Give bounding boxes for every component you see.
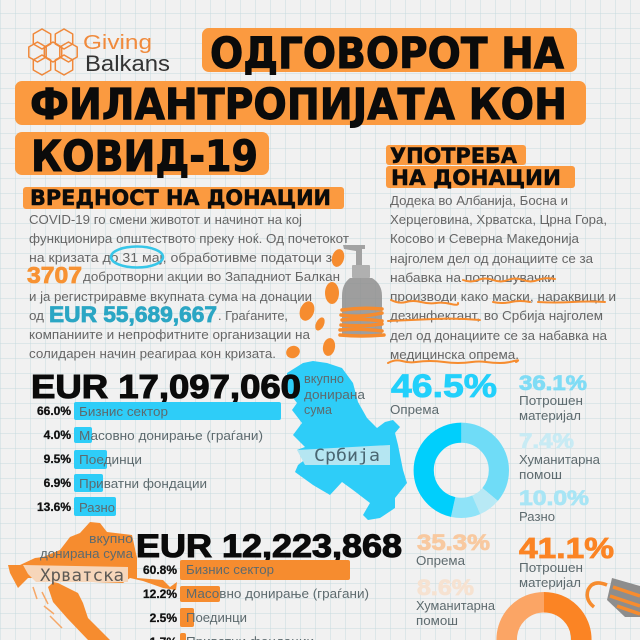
stat: humanitarian aid: 8.6%: [417, 575, 474, 600]
text block: use paragraph: набавка на потрошувачки: [390, 270, 555, 285]
stat: equipment: Опрема: [416, 553, 466, 568]
stat: consumables: материјал: [519, 408, 581, 423]
icon: sanitizer drops: [284, 248, 346, 360]
text block: use paragraph: Херцеговина, Хрватска, Црна Гора,: [390, 212, 607, 227]
panel: Serbia donations: [31, 368, 366, 516]
stat: equipment: 35.3%: [417, 530, 490, 555]
total: Serbia: EUR 17,097,060: [31, 368, 301, 405]
bar chart: Serbia donors: 9.5%: [44, 452, 71, 466]
text block: intro paragraph: и ја регистриравме вкупната сума на донации: [29, 289, 312, 304]
stat: other: Разно: [519, 509, 555, 524]
heading: value of donations: ВРЕДНОСТ НА ДОНАЦИИ: [30, 186, 331, 210]
stat: equipment: Опрема: [390, 402, 440, 417]
bar chart: Serbia donors: Приватни фондации: [79, 476, 207, 491]
panel: Serbia use of donations: [390, 368, 601, 524]
map: Croatia: [8, 522, 177, 640]
panel: Croatia donations: [40, 528, 402, 640]
text block: use paragraph: дезинфектант, во Србија најголем: [390, 308, 603, 323]
total: Croatia: вкупно: [89, 531, 133, 546]
title line 2: ФИЛАНТРОПИЈАТА КОН: [30, 80, 567, 130]
logo wordmark: Giving: [83, 32, 152, 54]
stat: equipment: 46.5%: [391, 368, 497, 404]
heading: use of donations: УПОТРЕБА: [390, 144, 518, 168]
bar chart: Croatia donors: [143, 560, 369, 640]
map label: Croatia: Хрватска: [40, 566, 124, 586]
Dalmatian islands: [33, 587, 62, 628]
text block: intro paragraph: COVID-19 го смени животот и начинот на кој: [29, 212, 302, 227]
callout: circled date: [111, 246, 163, 268]
icon: sanitizer bottle: [340, 245, 384, 336]
bar chart: Croatia donors: Бизнис сектор: [186, 562, 274, 577]
bar chart: Croatia donors: 2.5%: [150, 611, 177, 625]
stat: humanitarian aid: [416, 575, 496, 628]
stat: humanitarian aid: Хуманитарна: [416, 598, 496, 613]
icon: face mask: [587, 578, 640, 617]
title line 3: КОВИД-19: [31, 132, 258, 182]
bar chart: Croatia donors: 60.8%: [143, 563, 177, 577]
logo wordmark: Balkans: [85, 51, 170, 76]
text block: use paragraph: најголем дел од донациите се за: [390, 251, 594, 266]
bar chart: Serbia donors: Разно: [79, 500, 115, 515]
bar chart: Serbia donors: 6.9%: [44, 476, 71, 490]
donut chart: Serbia: [424, 433, 499, 508]
stat: consumables: 36.1%: [519, 372, 587, 395]
text block: intro paragraph: компаниите и непрофитните организации на: [29, 327, 311, 342]
text block: intro paragraph: 3707: [27, 262, 82, 288]
bar chart: Serbia donors: Бизнис сектор: [79, 404, 168, 419]
stat: other: 10.0%: [519, 487, 589, 510]
bar chart: Croatia donors: Масовно донирање (граѓани): [186, 586, 369, 601]
stat: consumables: 41.1%: [519, 533, 614, 565]
text block: use paragraph: медицинска опрема.: [390, 347, 519, 362]
stat: consumables: [519, 372, 587, 423]
total: Serbia: донирана: [304, 387, 366, 402]
total: Serbia: [31, 368, 366, 417]
text block: intro paragraph: [27, 212, 349, 361]
stat: consumables: Потрошен: [519, 560, 583, 575]
stat: humanitarian aid: помош: [416, 613, 458, 628]
text block: intro paragraph: EUR 55,689,667: [49, 302, 217, 327]
text block: use paragraph: Додека во Албанија, Босна и: [390, 193, 568, 208]
stat: humanitarian aid: 7.4%: [519, 430, 574, 453]
bar chart: Serbia donors: 4.0%: [44, 428, 71, 442]
stat: humanitarian aid: помош: [519, 467, 562, 482]
text block: intro paragraph: функционира општеството преку ноќ. Од почетокот: [29, 231, 349, 246]
heading: use of donations: НА ДОНАЦИИ: [391, 166, 561, 190]
stat: other: [519, 487, 589, 524]
text block: intro paragraph: на кризата до 31 мај, обработивме податоци за: [29, 250, 341, 265]
map label: Serbia: [297, 445, 390, 466]
stat: consumables: Потрошен: [519, 393, 583, 408]
bar chart: Serbia donors: Поединци: [79, 452, 142, 467]
total: Croatia: EUR 12,223,868: [136, 528, 402, 564]
text block: intro paragraph: добротворни акции во Западниот Балкан: [83, 269, 340, 284]
donut chart: Croatia: [507, 602, 581, 640]
title line 1: ОДГОВОРОТ НА: [210, 29, 565, 79]
stat: equipment: [416, 530, 490, 568]
bar chart: Serbia donors: [37, 402, 281, 516]
bar chart: Serbia donors: 13.6%: [37, 500, 71, 514]
bar chart: Serbia donors: Масовно донирање (граѓани): [79, 428, 263, 443]
text block: intro paragraph: од: [29, 308, 44, 323]
heading: use of donations: [386, 144, 575, 190]
text block: use paragraph: производи како маски, нараквици и: [390, 289, 616, 304]
map: Serbia: [287, 361, 407, 520]
text block: use paragraph: [388, 193, 616, 363]
title: [15, 28, 586, 182]
wavy underlines: [388, 278, 605, 363]
stat: humanitarian aid: [519, 430, 601, 482]
total: Croatia: [40, 528, 402, 564]
stat: equipment: [390, 368, 497, 417]
bar chart: Croatia donors: Поединци: [186, 610, 247, 625]
total: Croatia: донирана сума: [40, 546, 134, 561]
stat: humanitarian aid: Хуманитарна: [519, 452, 601, 467]
total: Serbia: сума: [304, 402, 333, 417]
bar chart: Croatia donors: 12.2%: [143, 587, 177, 601]
panel: Croatia use of donations: [416, 530, 640, 640]
bar chart: Serbia donors: 66.0%: [37, 404, 71, 418]
text block: intro paragraph: . Граѓаните,: [218, 308, 288, 323]
bottle scribble: [340, 308, 384, 336]
text block: use paragraph: дел од донациите се за набавка на: [390, 328, 608, 343]
text block: intro paragraph: солидарен начин реагираа кон кризата.: [29, 346, 276, 361]
stat: consumables: [519, 533, 614, 590]
stat: consumables: материјал: [519, 575, 581, 590]
total: Serbia: вкупно: [304, 371, 344, 386]
logo: Giving Balkans: [29, 29, 170, 76]
logo wordmark: [83, 32, 170, 76]
text block: use paragraph: Косово и Северна Македонија: [390, 231, 580, 246]
icon: hexagon cluster: [29, 29, 77, 75]
map label: Serbia: Србија: [314, 446, 380, 466]
